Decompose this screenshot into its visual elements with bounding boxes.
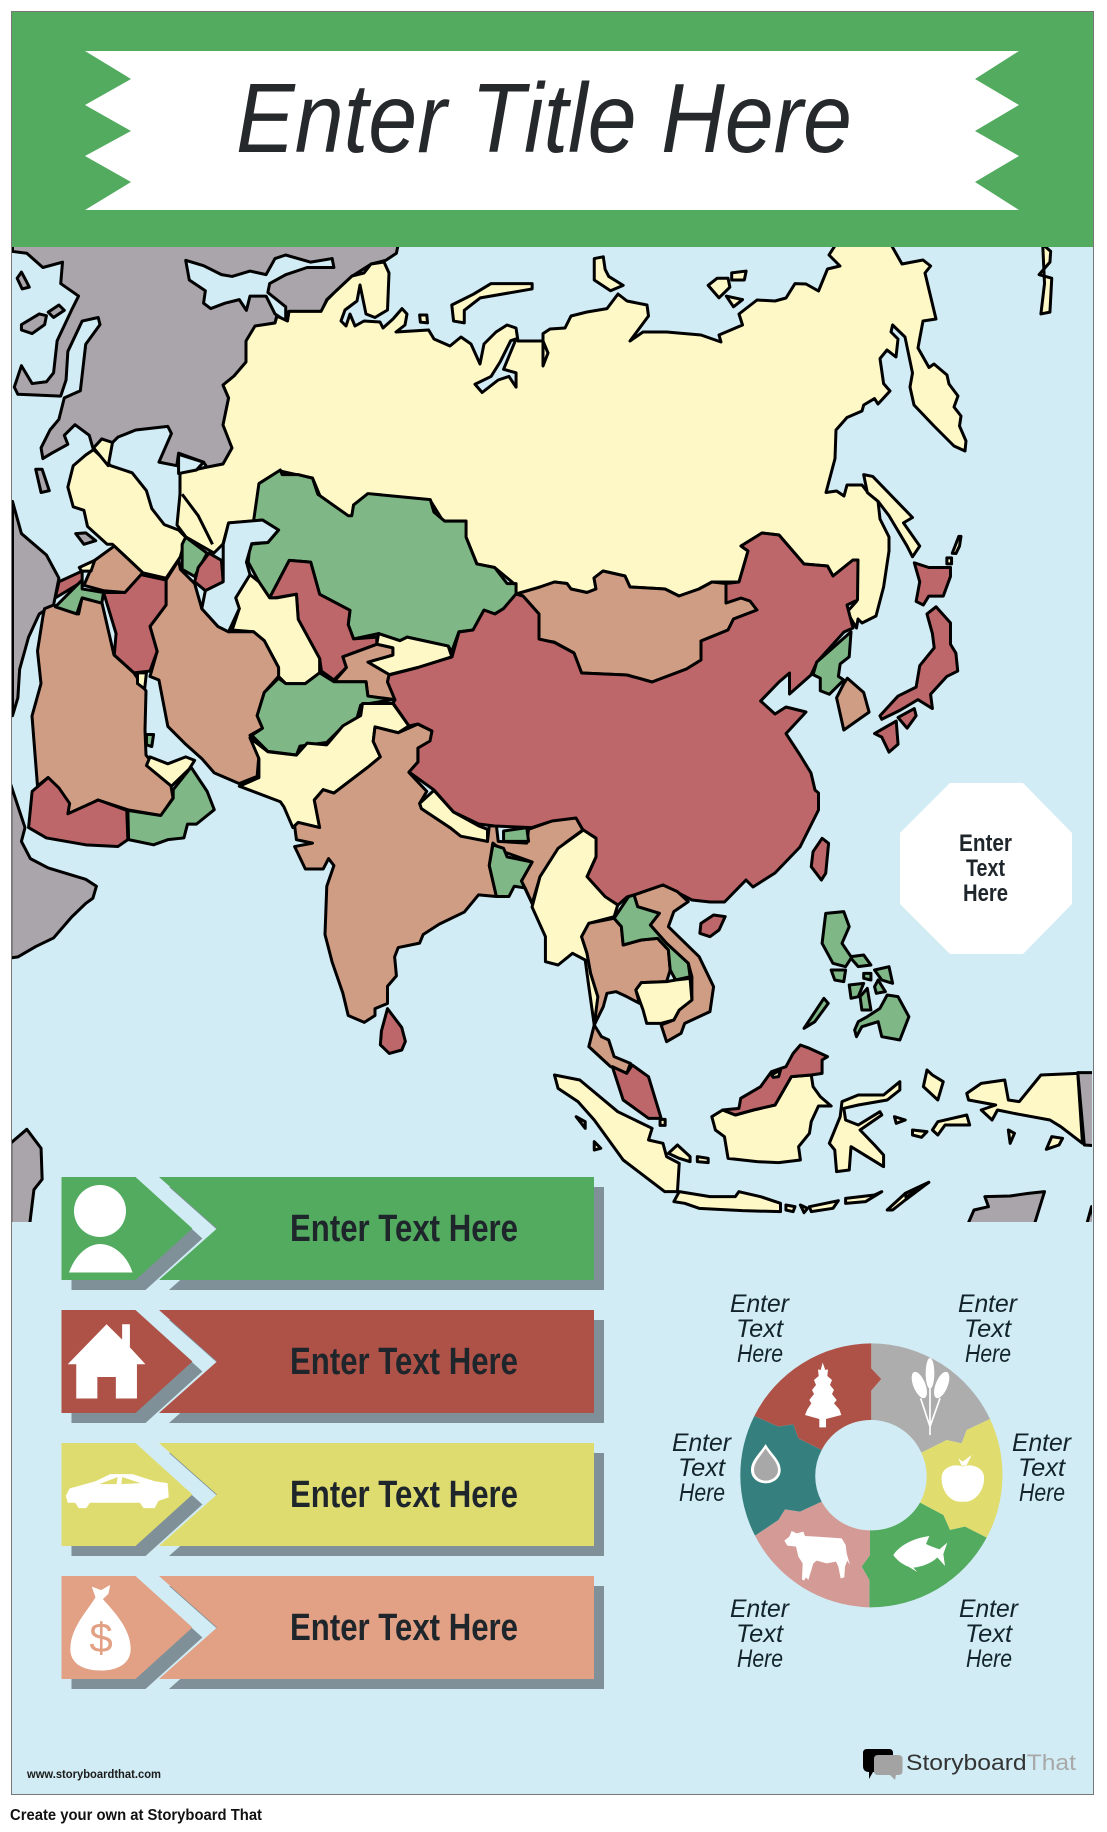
- logo: [863, 1749, 1076, 1780]
- icon: fish: [893, 1536, 947, 1572]
- icon: apple: [942, 1455, 984, 1502]
- Azerbaijan: [195, 553, 223, 591]
- Cambodia: [636, 978, 692, 1023]
- donut label top left: Here: [737, 1340, 783, 1368]
- segment: forest: [754, 1343, 881, 1450]
- Uzbekistan: [270, 560, 377, 680]
- segment: cattle: [755, 1502, 870, 1607]
- donut label top right: Text: [964, 1315, 1012, 1343]
- icon: cow: [784, 1531, 850, 1581]
- Oman: [128, 767, 214, 845]
- Shikoku: [898, 709, 916, 728]
- donut label bottom right: Text: [965, 1620, 1013, 1648]
- Java and lesser islands: [674, 1182, 929, 1213]
- icon: water drop: [751, 1444, 781, 1483]
- icon: money bag: $: [89, 1614, 113, 1661]
- Peninsular Malaysia: [612, 1065, 661, 1118]
- title ribbon: [85, 51, 1019, 210]
- New Guinea: [967, 1073, 1095, 1149]
- Philippines: [804, 912, 909, 1040]
- Turkmenistan: [232, 575, 320, 684]
- Arctic islands: [594, 244, 1052, 314]
- logo wordmark: Storyboard That: [906, 1750, 1076, 1775]
- South Korea: [837, 678, 869, 730]
- footer credit: Create your own at Storyboard That: [10, 1807, 263, 1824]
- India: [295, 724, 583, 1022]
- Brunei: [771, 1070, 781, 1077]
- donut label left: Enter: [672, 1429, 733, 1457]
- Georgia: [182, 537, 207, 576]
- icon: person: [69, 1185, 132, 1272]
- Central and West Asia countries: [55, 284, 532, 784]
- Hokkaido: [914, 563, 950, 605]
- Thrace: [94, 439, 112, 466]
- Laos: [614, 895, 690, 980]
- Cyprus strip: [79, 560, 95, 571]
- donut label top left: Text: [736, 1315, 784, 1343]
- North Korea: [813, 632, 851, 694]
- octagon callout: Enter: [959, 830, 1012, 857]
- map of Asia: [11, 241, 1095, 1228]
- donut label left: Text: [678, 1454, 726, 1482]
- donut label bottom right: Enter: [959, 1595, 1020, 1623]
- donut label left: Here: [679, 1479, 725, 1507]
- Mongolia: [516, 571, 757, 682]
- icon: car: [66, 1474, 169, 1508]
- Taiwan: [811, 838, 829, 880]
- donut label bottom right: Here: [966, 1645, 1012, 1673]
- Iran: [150, 560, 279, 784]
- Northeast Asia islands and peninsula: [594, 244, 1052, 752]
- Caspian Sea: [202, 520, 279, 632]
- Kazakhstan: [248, 470, 516, 651]
- icon: speech bubbles: [863, 1749, 902, 1780]
- Sumatra: [554, 1075, 679, 1192]
- Iraq: [104, 575, 166, 673]
- donut label left: [672, 1429, 733, 1507]
- icon: money bag: [70, 1585, 131, 1671]
- website url: www.storyboardthat.com: [26, 1767, 161, 1781]
- Bhutan: [504, 828, 529, 841]
- Arctic island Novaya Zemlya: [452, 284, 532, 323]
- Hainan: [700, 915, 725, 937]
- donut label right: Here: [1019, 1479, 1065, 1507]
- bar text: Enter Text Here: [290, 1607, 518, 1649]
- bar text: Enter Text Here: [290, 1208, 518, 1250]
- Pakistan: [239, 703, 409, 828]
- donut label right: Enter: [1012, 1429, 1073, 1457]
- Saudi Arabia: [32, 598, 173, 816]
- arrow bar: housing: [62, 1310, 604, 1423]
- arrow bar: money: [62, 1576, 604, 1689]
- segment: fish: [862, 1503, 987, 1607]
- Maluku islands: [894, 1070, 1014, 1143]
- small Arctic island: [420, 315, 427, 323]
- Kuwait: [137, 673, 146, 689]
- Afghanistan: [252, 673, 393, 755]
- donut label top left: Enter: [730, 1290, 791, 1318]
- bar text: Enter Text Here: [290, 1341, 518, 1383]
- Sri Lanka: [380, 1009, 405, 1053]
- Thailand: [582, 918, 670, 1073]
- Southeast Asia: [532, 830, 1095, 1227]
- donut label top right: [958, 1290, 1019, 1368]
- Jordan: [55, 580, 104, 614]
- donut label top right: Here: [965, 1340, 1011, 1368]
- icon: tree: [805, 1363, 841, 1427]
- South Asia and Arabian coast: [29, 703, 583, 1053]
- segment: fruit: [920, 1419, 1002, 1538]
- Ob gulf: [475, 339, 516, 392]
- Sea of Azov: [179, 454, 204, 474]
- Lebanon and Israel: [55, 571, 82, 598]
- Kuril islands: [947, 536, 961, 564]
- Honshu: [880, 607, 958, 719]
- octagon callout: Text: [966, 855, 1005, 882]
- Qatar: [146, 734, 154, 747]
- Sumatra small islands: [576, 1117, 708, 1163]
- Sulawesi: [829, 1082, 900, 1172]
- donut label bottom left: Text: [736, 1620, 784, 1648]
- arrow bar: transport: [62, 1443, 604, 1556]
- Syria: [84, 546, 143, 592]
- Borneo: [712, 1075, 831, 1163]
- octagon callout: Here: [963, 880, 1008, 907]
- Malaysian Borneo: [723, 1045, 828, 1115]
- Sakhalin: [864, 475, 920, 557]
- donut label right: [1012, 1429, 1073, 1507]
- Africa horn and Madagascar in grey: [11, 784, 96, 1228]
- donut label top right: Enter: [958, 1290, 1019, 1318]
- Australia in grey: [967, 1192, 1095, 1227]
- Kyrgyzstan: [368, 634, 452, 675]
- segment: grain: [871, 1343, 990, 1453]
- Bangladesh: [489, 845, 532, 903]
- title: Enter Title Here: [236, 63, 852, 173]
- segment: water: [740, 1416, 822, 1536]
- icon: house: [68, 1324, 145, 1398]
- Russia: [177, 241, 966, 628]
- donut label bottom left: [730, 1595, 791, 1673]
- octagon callout: [900, 783, 1072, 954]
- Myanmar: [532, 830, 618, 1025]
- Turkey: [68, 450, 186, 578]
- Kyushu: [875, 721, 898, 752]
- donut label top left: [730, 1290, 791, 1368]
- donut label right: Text: [1018, 1454, 1066, 1482]
- Europe and Africa in grey: [12, 244, 398, 716]
- China: [388, 533, 858, 905]
- UAE: [146, 757, 195, 786]
- donut label bottom left: Enter: [730, 1595, 791, 1623]
- Tajikistan: [334, 644, 396, 700]
- Caucasus border line: [182, 494, 212, 544]
- Yemen: [29, 778, 128, 847]
- bar text: Enter Text Here: [290, 1474, 518, 1516]
- donut label bottom right: [959, 1595, 1020, 1673]
- header band: [12, 12, 1093, 247]
- arrow bar: people: [62, 1177, 604, 1290]
- donut label bottom left: Here: [737, 1645, 783, 1673]
- resource donut: [740, 1343, 1002, 1607]
- icon: wheat: [909, 1358, 952, 1435]
- Vietnam: [634, 885, 714, 1042]
- Nepal: [420, 790, 487, 841]
